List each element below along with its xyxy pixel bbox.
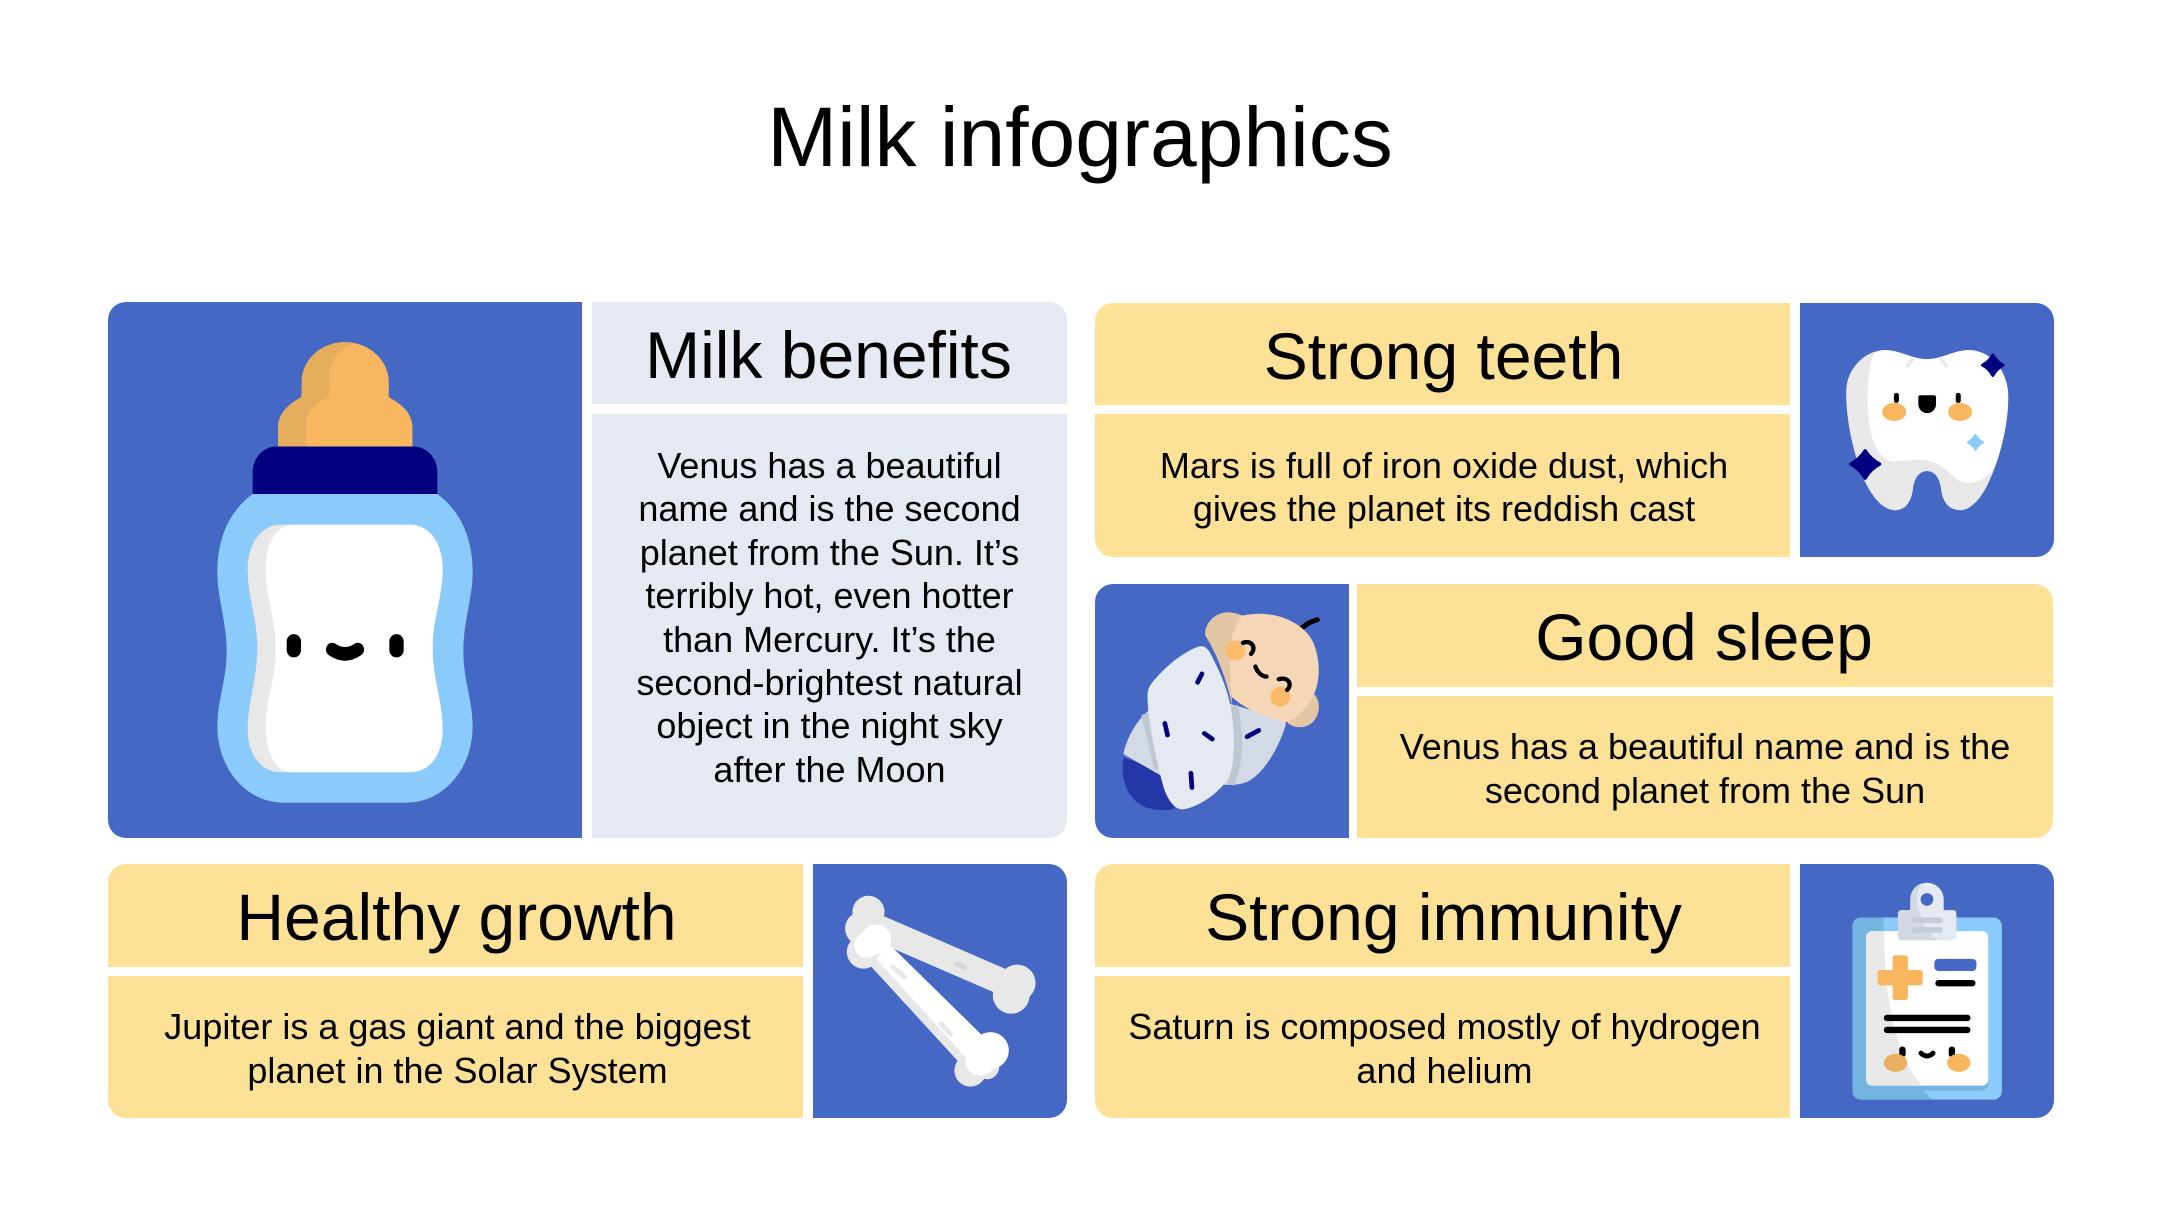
- text: strong teeth: [1095, 414, 1790, 557]
- panel: baby icon: [1095, 584, 1349, 838]
- heading: milk benefits: Milk benefits: [645, 318, 1012, 392]
- text: strong immunity: Saturn is composed mostly of hydrogen: [1128, 1006, 1761, 1047]
- text: milk benefits: terribly hot, even hotter: [645, 575, 1014, 616]
- text: milk benefits: Venus has a beautiful: [657, 445, 1002, 486]
- heading: good sleep: Good sleep: [1535, 600, 1873, 674]
- text: milk benefits: object in the night sky: [656, 705, 1003, 746]
- heading: healthy growth: Healthy growth: [236, 880, 677, 954]
- heading: strong immunity: Strong immunity: [1205, 880, 1682, 954]
- panel: tooth icon: [1800, 303, 2054, 557]
- icon: baby bottle: [217, 342, 473, 803]
- heading: strong teeth: [1095, 303, 1790, 405]
- text: strong immunity: and helium: [1356, 1050, 1533, 1090]
- heading: healthy growth: [108, 864, 803, 967]
- text: milk benefits: after the Moon: [713, 749, 946, 790]
- text: healthy growth: planet in the Solar System: [247, 1050, 668, 1090]
- text: healthy growth: [108, 976, 803, 1118]
- text: good sleep: [1357, 696, 2053, 838]
- text: milk benefits: second-brightest natural: [636, 662, 1023, 703]
- icon: tooth: [1846, 350, 2008, 510]
- icon: medical clipboard: [1852, 883, 2002, 1100]
- panel: bottle icon: [108, 302, 582, 838]
- text: milk benefits: name and is the second: [638, 488, 1021, 529]
- text: strong immunity: [1095, 976, 1790, 1118]
- icon: bones: [845, 896, 1036, 1087]
- title: Milk infographics: [767, 90, 1393, 184]
- icon: swaddled baby: [1123, 612, 1319, 810]
- text: milk benefits: than Mercury. It’s the: [663, 618, 996, 660]
- panel: bones icon: [813, 864, 1067, 1118]
- text: good sleep: Venus has a beautiful name and is the: [1400, 726, 2010, 767]
- text: milk benefits: [592, 414, 1067, 838]
- heading: milk benefits: [592, 302, 1067, 404]
- text: milk benefits: planet from the Sun. It’s: [640, 532, 1019, 573]
- text: good sleep: second planet from the Sun: [1485, 770, 1925, 810]
- heading: strong immunity: [1095, 864, 1790, 967]
- text: healthy growth: Jupiter is a gas giant and the biggest: [164, 1006, 751, 1047]
- heading: good sleep: [1357, 584, 2053, 687]
- text: strong teeth: Mars is full of iron oxide dust, which: [1160, 445, 1728, 486]
- text: strong teeth: gives the planet its reddish cast: [1193, 488, 1695, 529]
- panel: clipboard icon: [1800, 864, 2054, 1118]
- heading: strong teeth: Strong teeth: [1264, 318, 1623, 392]
